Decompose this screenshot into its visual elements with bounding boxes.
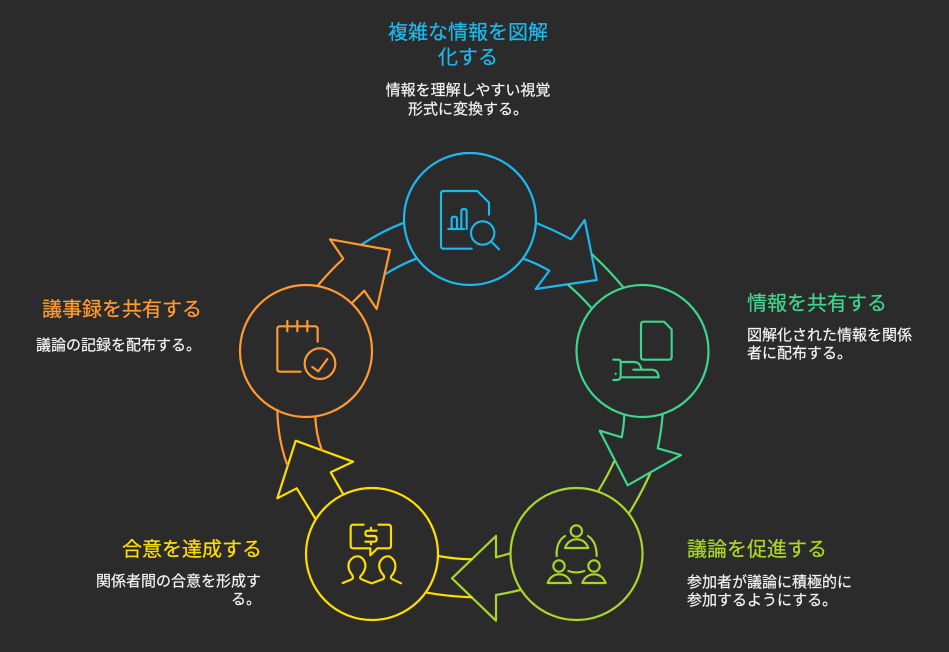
icon: two people and dollar speech bubble	[343, 525, 401, 583]
step circle: share	[576, 285, 708, 417]
description: visualize: 形式に変換する。	[408, 100, 528, 118]
heading: discussion: 議論を促進する	[687, 539, 827, 561]
description: visualize: 情報を理解しやすい視覚	[386, 82, 550, 98]
heading: visualize	[388, 22, 548, 68]
icon: document with chart and magnifier	[441, 191, 499, 249]
text block: discussion	[687, 538, 852, 608]
description: visualize	[386, 82, 550, 118]
text block: minutes	[36, 298, 202, 354]
description: minutes: 議論の記録を配布する。	[36, 337, 201, 354]
heading: consensus: 合意を達成する	[122, 539, 262, 561]
heading: share: 情報を共有する	[747, 293, 887, 315]
step circle: discussion	[510, 488, 642, 620]
description: share	[747, 327, 912, 362]
step circle: visualize	[404, 153, 536, 285]
arrow: green, to lime step	[568, 254, 681, 485]
description: discussion	[687, 574, 852, 608]
heading: visualize: 複雑な情報を図解	[388, 22, 548, 44]
text block: share	[747, 292, 912, 362]
arrow: blue, to green step	[361, 220, 597, 289]
description: consensus	[96, 573, 261, 608]
arrow: orange, to blue step	[277, 239, 390, 465]
step circle: minutes	[240, 285, 372, 417]
description: share: 者に配布する。	[747, 345, 852, 362]
text block: visualize	[386, 22, 550, 118]
description: share: 図解化された情報を関係	[747, 327, 912, 344]
arrow: yellow, to orange step	[277, 441, 472, 597]
description: consensus: る。	[231, 591, 261, 608]
heading: visualize: 化する	[438, 46, 498, 68]
heading: minutes: 議事録を共有する	[42, 299, 202, 321]
description: discussion: 参加するようにする。	[687, 592, 837, 608]
arrow: lime, to yellow step	[452, 462, 650, 621]
step circle: consensus	[306, 488, 438, 620]
description: consensus: 関係者間の合意を形成す	[96, 573, 261, 590]
description: discussion: 参加者が議論に積極的に	[687, 574, 852, 590]
icon: calendar with check mark	[277, 321, 335, 379]
icon: hand holding document	[613, 322, 672, 380]
text block: consensus	[96, 538, 262, 608]
icon: three people in discussion	[548, 525, 606, 583]
